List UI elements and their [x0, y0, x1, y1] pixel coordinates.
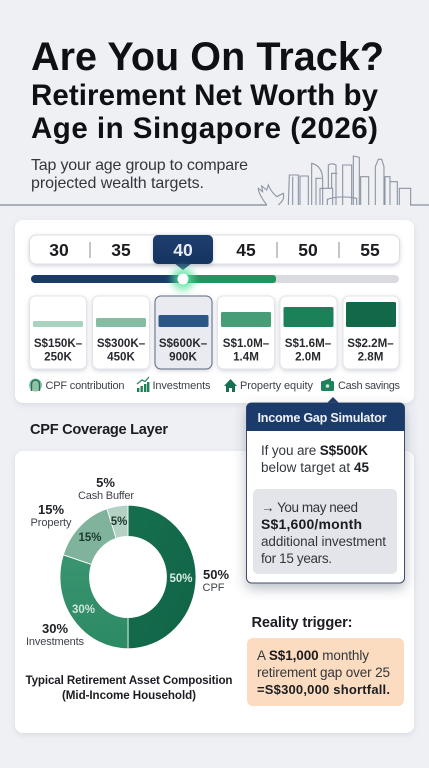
target cards: S$600K–	[159, 337, 208, 350]
age selector: 45	[236, 240, 256, 260]
age selector: 35	[111, 240, 131, 260]
title block: Age in Singapore (2026)	[31, 112, 378, 145]
age selector: 40	[173, 240, 193, 260]
subtitle	[31, 157, 248, 192]
target cards: 450K	[107, 350, 135, 364]
target cards: S$300K–	[97, 337, 146, 350]
subtitle: Tap your age group to compare	[31, 157, 248, 174]
donut segment values: 50%	[169, 573, 193, 585]
panel: age selector and targets	[15, 220, 414, 403]
simulator text: below target at 45	[261, 460, 369, 475]
donut segment values: 15%	[78, 532, 102, 544]
simulator result box	[253, 489, 397, 574]
icon: investments chart	[137, 377, 149, 392]
panel: income gap simulator: Income Gap Simulator	[258, 411, 387, 425]
target cards: S$1.6M–	[285, 337, 332, 350]
donut outer labels: Investments	[26, 636, 84, 648]
donut outer labels: Cash Buffer	[78, 490, 134, 502]
progress slider	[31, 268, 399, 290]
donut outer labels: 15%	[38, 502, 64, 517]
chart caption: Typical Retirement Asset Composition	[26, 674, 232, 687]
donut outer labels: 50%	[203, 567, 229, 582]
donut outer labels	[26, 475, 229, 648]
title block: Retirement Net Worth by	[31, 79, 379, 112]
subtitle: projected wealth targets.	[31, 175, 204, 192]
target cards: 1.4M	[233, 350, 259, 364]
callout: reality trigger	[247, 638, 404, 706]
simulator text: If you are S$500K	[261, 443, 368, 458]
target cards: 900K	[169, 350, 197, 364]
heading: reality trigger: Reality trigger:	[252, 615, 352, 631]
target cards: S$2.2M–	[347, 337, 394, 350]
donut outer labels: 30%	[42, 621, 68, 636]
legend: Cash savings	[338, 380, 400, 392]
legend	[29, 377, 400, 392]
skyline illustration	[0, 156, 429, 205]
donut outer labels: CPF	[202, 582, 225, 594]
target cards: 2.0M	[295, 350, 321, 364]
age selector	[30, 235, 400, 270]
donut outer labels: Property	[30, 517, 72, 529]
callout: reality trigger: =S$300,000 shortfall.	[257, 682, 390, 697]
age selector: 55	[360, 240, 380, 260]
legend: CPF contribution	[46, 380, 124, 392]
title block	[31, 35, 384, 145]
target cards: 250K	[44, 350, 72, 364]
age selector: 30	[49, 240, 69, 260]
callout: reality trigger: A S$1,000 monthly	[257, 648, 369, 663]
icon: CPF badge	[29, 378, 42, 392]
donut chart	[60, 505, 196, 649]
simulator text	[261, 443, 369, 475]
donut segment values: 30%	[72, 604, 95, 616]
simulator result box: S$1,600/month	[261, 516, 362, 532]
simulator result box: → You may need	[261, 500, 358, 515]
callout: reality trigger: retirement gap over 25	[257, 665, 390, 680]
target cards: S$1.0M–	[223, 337, 270, 350]
panel: asset composition	[15, 451, 414, 733]
legend: Property equity	[240, 380, 314, 392]
panel: income gap simulator	[246, 397, 404, 583]
donut segment values	[72, 516, 193, 616]
target cards: 2.8M	[358, 350, 383, 364]
legend: Investments	[152, 380, 211, 392]
icon: house	[224, 379, 237, 392]
donut segment values: 5%	[111, 516, 127, 528]
target cards: S$150K–	[34, 337, 83, 350]
target cards	[30, 296, 399, 369]
donut outer labels: 5%	[96, 475, 115, 490]
simulator result box: for 15 years.	[261, 551, 332, 566]
chart caption	[26, 674, 232, 702]
title block: Are You On Track?	[31, 35, 384, 79]
heading: CPF coverage layer: CPF Coverage Layer	[30, 422, 168, 438]
age selector: 50	[298, 240, 318, 260]
chart caption: (Mid-Income Household)	[62, 689, 196, 702]
icon: cash	[321, 378, 334, 391]
simulator result box: additional investment	[261, 534, 386, 549]
